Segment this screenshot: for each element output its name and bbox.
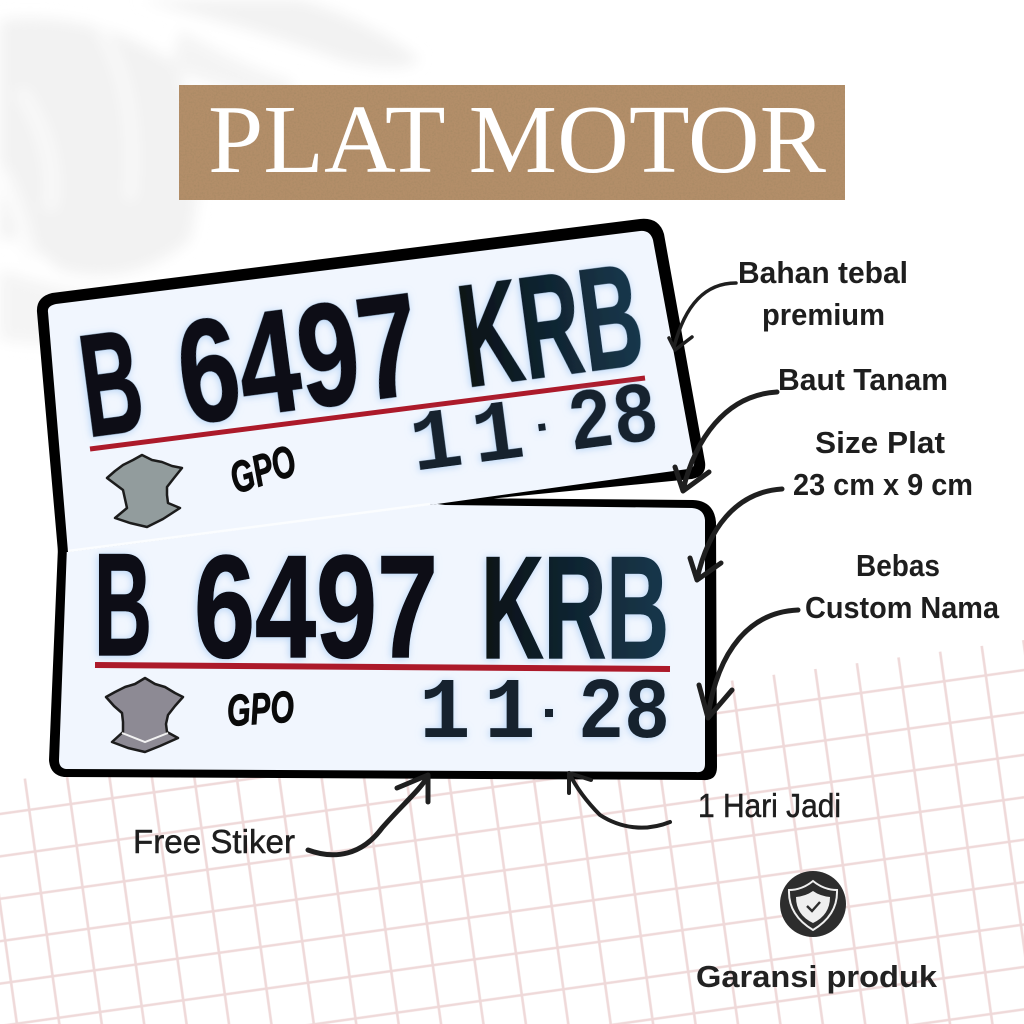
rear expiry date bbox=[405, 367, 664, 497]
callout: Bebas Custom Nama: Bebas bbox=[856, 548, 940, 583]
front red line bbox=[95, 665, 670, 669]
rear expiry date: 28 bbox=[562, 367, 664, 476]
rear plate number: B bbox=[71, 298, 152, 468]
callout: Free Stiker bbox=[133, 775, 428, 860]
plate: front licence plate bbox=[49, 498, 717, 780]
rear plate number: 6497 bbox=[168, 262, 429, 455]
callout: Bahan tebal premium bbox=[669, 255, 908, 350]
front GPO mark: GPO bbox=[225, 682, 296, 736]
callout: Baut Tanam: Baut Tanam bbox=[778, 362, 948, 397]
callout: Size Plat 23 cm x 9 cm bbox=[690, 425, 973, 580]
plate: rear tilted licence plate bbox=[37, 219, 705, 552]
rear red line bbox=[90, 378, 645, 449]
callout: Bebas Custom Nama bbox=[699, 548, 1000, 718]
title banner bbox=[179, 85, 845, 200]
callout: Free Stiker: Free Stiker bbox=[133, 823, 295, 860]
rear plate number: KRB bbox=[450, 233, 651, 418]
icon: guarantee shield bbox=[780, 871, 846, 937]
guarantee label: Garansi produk bbox=[696, 959, 938, 994]
rear emblem bbox=[107, 455, 182, 527]
front emblem bbox=[106, 678, 183, 752]
front expiry date: 28 bbox=[578, 665, 670, 763]
front expiry date: 11 bbox=[419, 665, 536, 763]
front plate number: KRB bbox=[481, 526, 669, 689]
rear GPO mark: GPO bbox=[224, 437, 302, 504]
background: pink grid paper bbox=[0, 640, 1024, 1024]
callout: 1 Hari Jadi: 1 Hari Jadi bbox=[698, 787, 841, 824]
callout: Bahan tebal premium: Bahan tebal bbox=[738, 255, 908, 290]
rear expiry date: 11 bbox=[405, 385, 530, 497]
front expiry date bbox=[419, 665, 670, 763]
front plate number: 6497 bbox=[194, 525, 438, 688]
front plate number: B bbox=[94, 523, 152, 686]
title: PLAT MOTOR bbox=[208, 86, 827, 194]
front plate number bbox=[94, 523, 669, 689]
callout: Size Plat 23 cm x 9 cm: 23 cm x 9 cm bbox=[793, 467, 973, 502]
callout: Baut Tanam bbox=[675, 362, 948, 491]
rear plate number bbox=[71, 233, 651, 468]
callout: Bebas Custom Nama: Custom Nama bbox=[805, 590, 1000, 625]
background: blurred palm shadow bbox=[0, 0, 420, 345]
callout: Bahan tebal premium: premium bbox=[762, 297, 885, 332]
callout: Size Plat 23 cm x 9 cm: Size Plat bbox=[815, 425, 945, 460]
callout: 1 Hari Jadi bbox=[569, 773, 841, 828]
